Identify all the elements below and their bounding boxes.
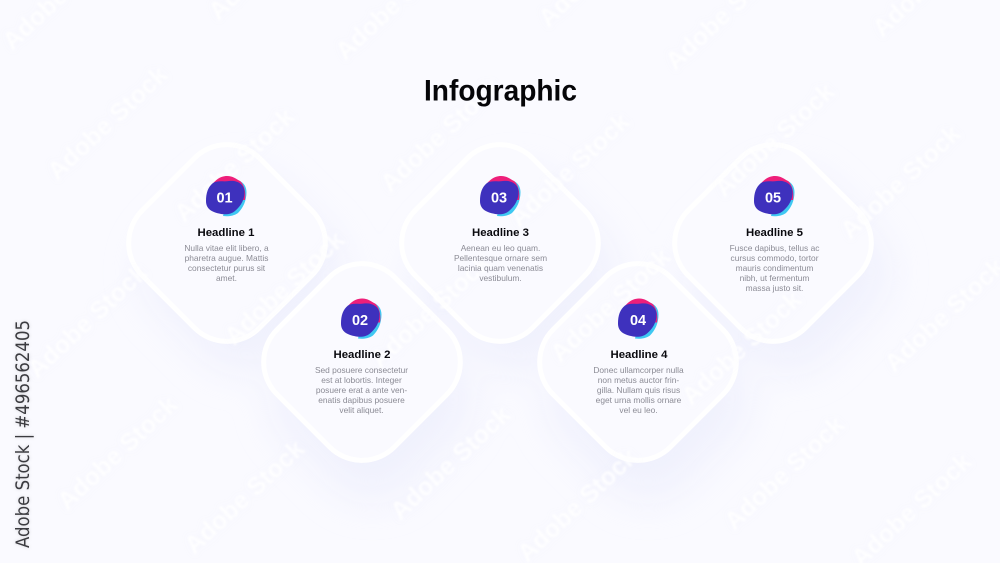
watermark pattern: Adobe Stock bbox=[835, 120, 966, 244]
watermark pattern: Adobe Stock bbox=[719, 411, 850, 535]
watermark pattern: Adobe Stock bbox=[52, 391, 183, 515]
background shadows bbox=[124, 153, 908, 519]
panel: diamond 5 bbox=[656, 126, 890, 360]
text block 3: lacinia quam venenatis bbox=[458, 263, 543, 273]
headline 4: Headline 4 bbox=[611, 349, 668, 361]
text block 5: massa justo sit. bbox=[746, 283, 803, 293]
title: Infographic bbox=[424, 74, 577, 108]
step 4 content bbox=[593, 298, 684, 415]
headline 5: Headline 5 bbox=[746, 227, 804, 239]
text block 2: enatis dapibus posuere bbox=[318, 395, 405, 405]
text block 1 bbox=[184, 243, 269, 283]
watermark pattern: Adobe Stock bbox=[709, 78, 840, 202]
text block 2 bbox=[315, 365, 408, 415]
text block 4: gilla. Nullam quis risus bbox=[597, 385, 680, 395]
watermark pattern: Adobe Stock bbox=[42, 61, 173, 185]
text block 1: pharetra augue. Mattis bbox=[185, 253, 268, 263]
text block 1: amet. bbox=[216, 273, 237, 283]
text block 4: eget urna mollis ornare bbox=[596, 395, 682, 405]
headline 2: Headline 2 bbox=[334, 349, 390, 361]
watermark pattern: Adobe Stock bbox=[375, 73, 506, 197]
icon: blob 01: 01 bbox=[216, 190, 233, 206]
text block 2: velit aliquet. bbox=[339, 405, 384, 415]
text block 4: Donec ullamcorper nulla bbox=[593, 365, 684, 375]
step 1 content bbox=[184, 176, 269, 283]
text block 5: Fusce dapibus, tellus ac bbox=[730, 243, 819, 253]
panel: diamond 2 bbox=[245, 245, 479, 479]
watermark pattern: Adobe Stock bbox=[365, 249, 496, 373]
stock id side label: Adobe Stock | #496562405 bbox=[12, 320, 34, 548]
text block 2: posuere erat a ante ven- bbox=[316, 385, 407, 395]
watermark pattern: Adobe Stock bbox=[179, 435, 310, 559]
watermark pattern: Adobe Stock bbox=[545, 243, 676, 367]
watermark pattern: Adobe Stock bbox=[169, 103, 300, 227]
watermark pattern: Adobe Stock bbox=[219, 226, 350, 350]
text block 1: consectetur purus sit bbox=[188, 263, 266, 273]
text block 5: nibh, ut fermentum bbox=[740, 273, 809, 283]
headline 3: Headline 3 bbox=[472, 227, 529, 239]
panel: diamond 3 bbox=[383, 126, 617, 360]
text block 1: Nulla vitae elit libero, a bbox=[184, 243, 269, 253]
text block 4: non metus auctor frin- bbox=[598, 375, 679, 385]
panel: diamond 4 bbox=[521, 245, 755, 479]
text block 3: Aenean eu leo quam. bbox=[461, 243, 540, 253]
watermark pattern: Adobe Stock bbox=[676, 286, 807, 410]
headline 1: Headline 1 bbox=[198, 227, 255, 239]
icon: blob 04: 04 bbox=[630, 313, 646, 329]
text block 2: est at lobortis. Integer bbox=[321, 375, 402, 385]
text block 5 bbox=[730, 243, 819, 293]
step 2 content bbox=[315, 298, 408, 415]
text block 3 bbox=[454, 243, 547, 283]
watermark pattern: Adobe Stock bbox=[22, 259, 153, 383]
text block 5: cursus commodo, tortor bbox=[731, 253, 819, 263]
panel: diamond 1 bbox=[110, 126, 344, 360]
icon: blob 03: 03 bbox=[491, 190, 507, 206]
step 3 content bbox=[454, 176, 547, 283]
text block 3: Pellentesque ornare sem bbox=[454, 253, 547, 263]
text block 3: vestibulum. bbox=[479, 273, 522, 283]
icon: blob 02: 02 bbox=[352, 313, 368, 329]
watermark pattern: Adobe Stock bbox=[385, 401, 516, 525]
step 5 content bbox=[730, 176, 819, 293]
watermark pattern: Adobe Stock bbox=[504, 108, 635, 232]
text block 4 bbox=[593, 365, 684, 415]
icon: blob 05: 05 bbox=[765, 190, 781, 206]
text block 4: vel eu leo. bbox=[619, 405, 658, 415]
text block 5: mauris condimentum bbox=[736, 263, 813, 273]
text block 2: Sed posuere consectetur bbox=[315, 365, 408, 375]
